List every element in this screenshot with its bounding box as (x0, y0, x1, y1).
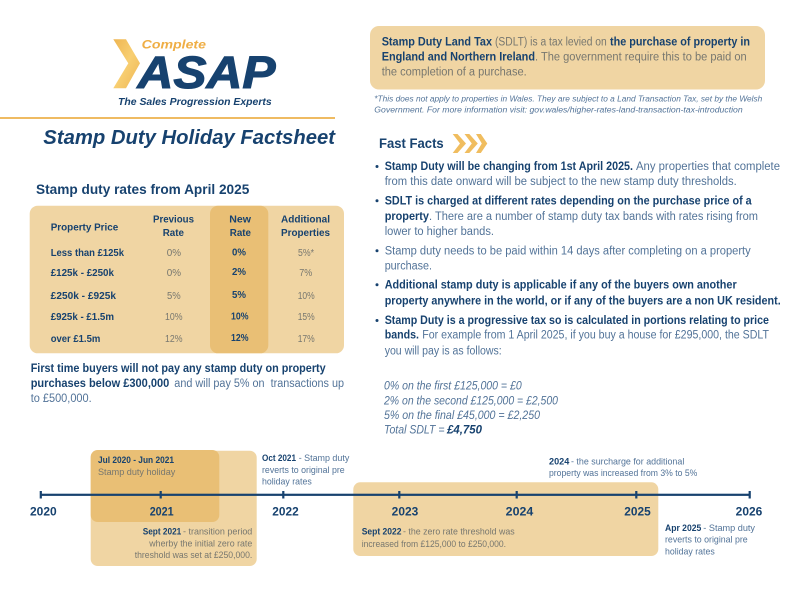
panel: timeline (30, 450, 762, 566)
panel: SDLT definition: Stamp Duty Land Tax (382, 37, 493, 49)
logo word: ASAP: ASAP (136, 47, 277, 98)
worked example calculation: Total SDLT = (384, 425, 445, 437)
icon: triple chevrons (453, 134, 487, 153)
fact: progressive tax: Stamp Duty is a progressive tax so is calculated in portions relating to price (385, 315, 769, 327)
first time buyers note: First time buyers will not pay any stamp duty on property (31, 363, 326, 375)
first time buyers note: purchases below £300,000 (31, 378, 169, 390)
new rate column highlight (210, 206, 268, 353)
event: Oct 2021: - Stamp duty (299, 453, 350, 463)
timeline year labels: 2021 (150, 507, 174, 519)
fact: additional stamp duty: property anywhere in the world, or if any of the buyers are a non UK resident. (385, 295, 781, 307)
event: Sept 2021: wherby the initial zero rate (148, 538, 252, 548)
table column: property price (51, 248, 124, 345)
fact: progressive tax: you will pay is as follows: (385, 345, 502, 357)
event: Sept 2022: increased from £125,000 to £250,000. (362, 539, 506, 549)
fact: different rates (385, 195, 758, 238)
timeline axis (40, 491, 751, 498)
worked example calculation (383, 380, 559, 437)
event: Jul 2020 - Jun 2021: Jul 2020 - Jun 2021 (98, 455, 174, 465)
event: 2024 surcharge (549, 456, 697, 478)
logo word: Complete: Complete (142, 38, 206, 52)
first time buyers note (31, 363, 344, 405)
fact: different rates: SDLT is charged at different rates depending on the purchase price of a (385, 195, 752, 207)
table column: previous rate (165, 248, 183, 345)
icon: logo chevron (113, 39, 140, 88)
header rule (0, 117, 335, 119)
table header row: Rate (163, 228, 184, 239)
table column: new rate: 2% (232, 267, 246, 278)
event: Jul 2020 - Jun 2021: Stamp duty holiday (98, 467, 176, 477)
footnote: Wales (374, 93, 763, 114)
table column: new rate: 12% (231, 333, 249, 344)
fact: progressive tax: bands. (385, 330, 419, 342)
event: 2024 surcharge: property was increased from 3% to 5% (549, 468, 697, 478)
panel: SDLT definition (370, 26, 765, 90)
table column: property price: Less than £125k (51, 248, 124, 259)
panel: SDLT definition: (SDLT) is a tax levied on (495, 37, 607, 49)
table column: previous rate: 10% (165, 312, 183, 323)
highlight: Sept 2022 threshold (353, 482, 658, 556)
highlight: Sept 2021 transition (91, 451, 257, 566)
event: Oct 2021 (262, 453, 350, 486)
table column: new rate (231, 248, 249, 344)
timeline year labels: 2026 (736, 507, 762, 519)
table column: new rate: 5% (232, 290, 246, 301)
fact: 14 days: Stamp duty needs to be paid within 14 days after completing on a property (385, 245, 751, 257)
table background (30, 206, 344, 353)
worked example calculation: 5% on the final £45,000 = £2,250 (384, 410, 541, 422)
table column: previous rate: 5% (167, 291, 181, 302)
event: Jul 2020 - Jun 2021 (98, 455, 176, 477)
timeline year labels: 2025 (624, 507, 651, 519)
table column: additional properties: 7% (299, 268, 312, 279)
table header row: New (229, 214, 251, 226)
logo: Complete ASAP (113, 38, 277, 108)
table column: additional properties: 15% (298, 312, 315, 323)
table column: additional properties: 10% (298, 291, 315, 302)
table column: new rate: 0% (232, 248, 246, 258)
table column: additional properties (298, 248, 315, 345)
table header row: Previous (153, 214, 194, 226)
event: Sept 2021 (135, 526, 252, 560)
event: Sept 2022: Sept 2022 (362, 526, 402, 536)
event: Apr 2025: holiday rates (665, 546, 715, 556)
fact: different rates: lower to higher bands. (385, 226, 494, 238)
event: Sept 2022: - the zero rate threshold was (403, 526, 515, 536)
event: Apr 2025: reverts to original pre (665, 534, 748, 544)
footnote: Wales: *This does not apply to properties in Wales. They are subject to a Land Transaction Tax, set by the Welsh (374, 93, 763, 103)
heading: Fast Facts: Fast Facts (379, 135, 444, 151)
table column: previous rate: 0% (167, 248, 181, 259)
first time buyers note: and will pay 5% on transactions up (174, 378, 344, 390)
table header row (51, 214, 330, 239)
event: Oct 2021: Oct 2021 (262, 453, 296, 463)
table column: additional properties: 17% (298, 334, 315, 345)
worked example calculation: £4,750 (446, 425, 483, 437)
table header row: Additional (281, 214, 330, 226)
timeline year labels: 2023 (392, 507, 418, 519)
panel: SDLT definition: the completion of a purchase. (382, 67, 527, 79)
table header row: Property Price (51, 222, 119, 234)
fact: 14 days (385, 245, 751, 272)
table column: property price: £250k - £925k (51, 291, 116, 302)
panel: rates table (30, 206, 344, 353)
fact: 14 days: purchase. (385, 260, 432, 272)
panel: fast facts list (376, 161, 781, 437)
table column: property price: £925k - £1.5m (51, 312, 114, 323)
timeline year labels: 2024 (506, 507, 534, 519)
table column: property price: over £1.5m (51, 334, 100, 345)
highlight: stamp duty holiday (91, 450, 219, 522)
table column: previous rate: 12% (165, 334, 183, 345)
event: Sept 2021: - transition period (183, 526, 252, 536)
panel: SDLT definition: England and Northern Ireland (382, 52, 535, 64)
event: Sept 2021: threshold was set at £250,000. (135, 550, 252, 560)
table column: additional properties: 5%* (298, 248, 314, 259)
event: 2024 surcharge: 2024 (549, 456, 570, 466)
fact: change date (385, 161, 780, 188)
bullet markers (376, 165, 378, 322)
event: Oct 2021: reverts to original pre (262, 465, 345, 475)
table column: property price: £125k - £250k (51, 268, 114, 279)
table header row: Properties (281, 228, 330, 239)
first time buyers note: to £500,000. (31, 393, 92, 405)
table header row: Rate (230, 228, 251, 239)
event: Oct 2021: holiday rates (262, 476, 312, 486)
heading: stamp duty rates: Stamp duty rates from April 2025 (36, 181, 249, 197)
table column: new rate: 10% (231, 312, 249, 322)
footnote: Wales: Government. For more information visit: gov.wales/higher-rates-land-transaction-tax-introduction (374, 104, 743, 114)
fact: different rates: property (385, 211, 430, 223)
table column: previous rate: 0% (167, 268, 181, 279)
title: Stamp Duty Holiday Factsheet (43, 127, 336, 149)
panel: SDLT definition: . The government require this to be paid on (535, 52, 747, 64)
fact: change date: Any properties that complete (636, 161, 780, 173)
fact: change date: Stamp Duty will be changing from 1st April 2025. (385, 161, 633, 173)
event: Sept 2021: Sept 2021 (143, 526, 181, 536)
event: Apr 2025 (665, 523, 755, 556)
fact: progressive tax (385, 315, 769, 357)
panel: SDLT definition: the purchase of property in (610, 37, 750, 49)
fact: progressive tax: For example from 1 April 2025, if you buy a house for £295,000, the SDLT (422, 330, 769, 342)
worked example calculation: 0% on the first £125,000 = £0 (384, 380, 522, 392)
fact: additional stamp duty (385, 279, 781, 307)
timeline year labels: 2020 (30, 507, 57, 519)
event: 2024 surcharge: - the surcharge for additional (571, 456, 684, 466)
worked example calculation: 2% on the second £125,000 = £2,500 (383, 395, 559, 407)
logo tagline: The Sales Progression Experts (118, 96, 272, 108)
timeline year labels: 2022 (272, 507, 299, 519)
fact: different rates: . There are a number of stamp duty tax bands with rates rising from (429, 211, 758, 223)
fact: additional stamp duty: Additional stamp duty is applicable if any of the buyers own another (385, 279, 737, 291)
timeline year labels (30, 507, 762, 519)
event: Apr 2025: - Stamp duty (703, 523, 755, 533)
event: Apr 2025: Apr 2025 (665, 523, 701, 533)
fact: change date: from this date onward will be subject to the new stamp duty thresholds. (385, 176, 737, 188)
event: Sept 2022 (362, 526, 515, 549)
